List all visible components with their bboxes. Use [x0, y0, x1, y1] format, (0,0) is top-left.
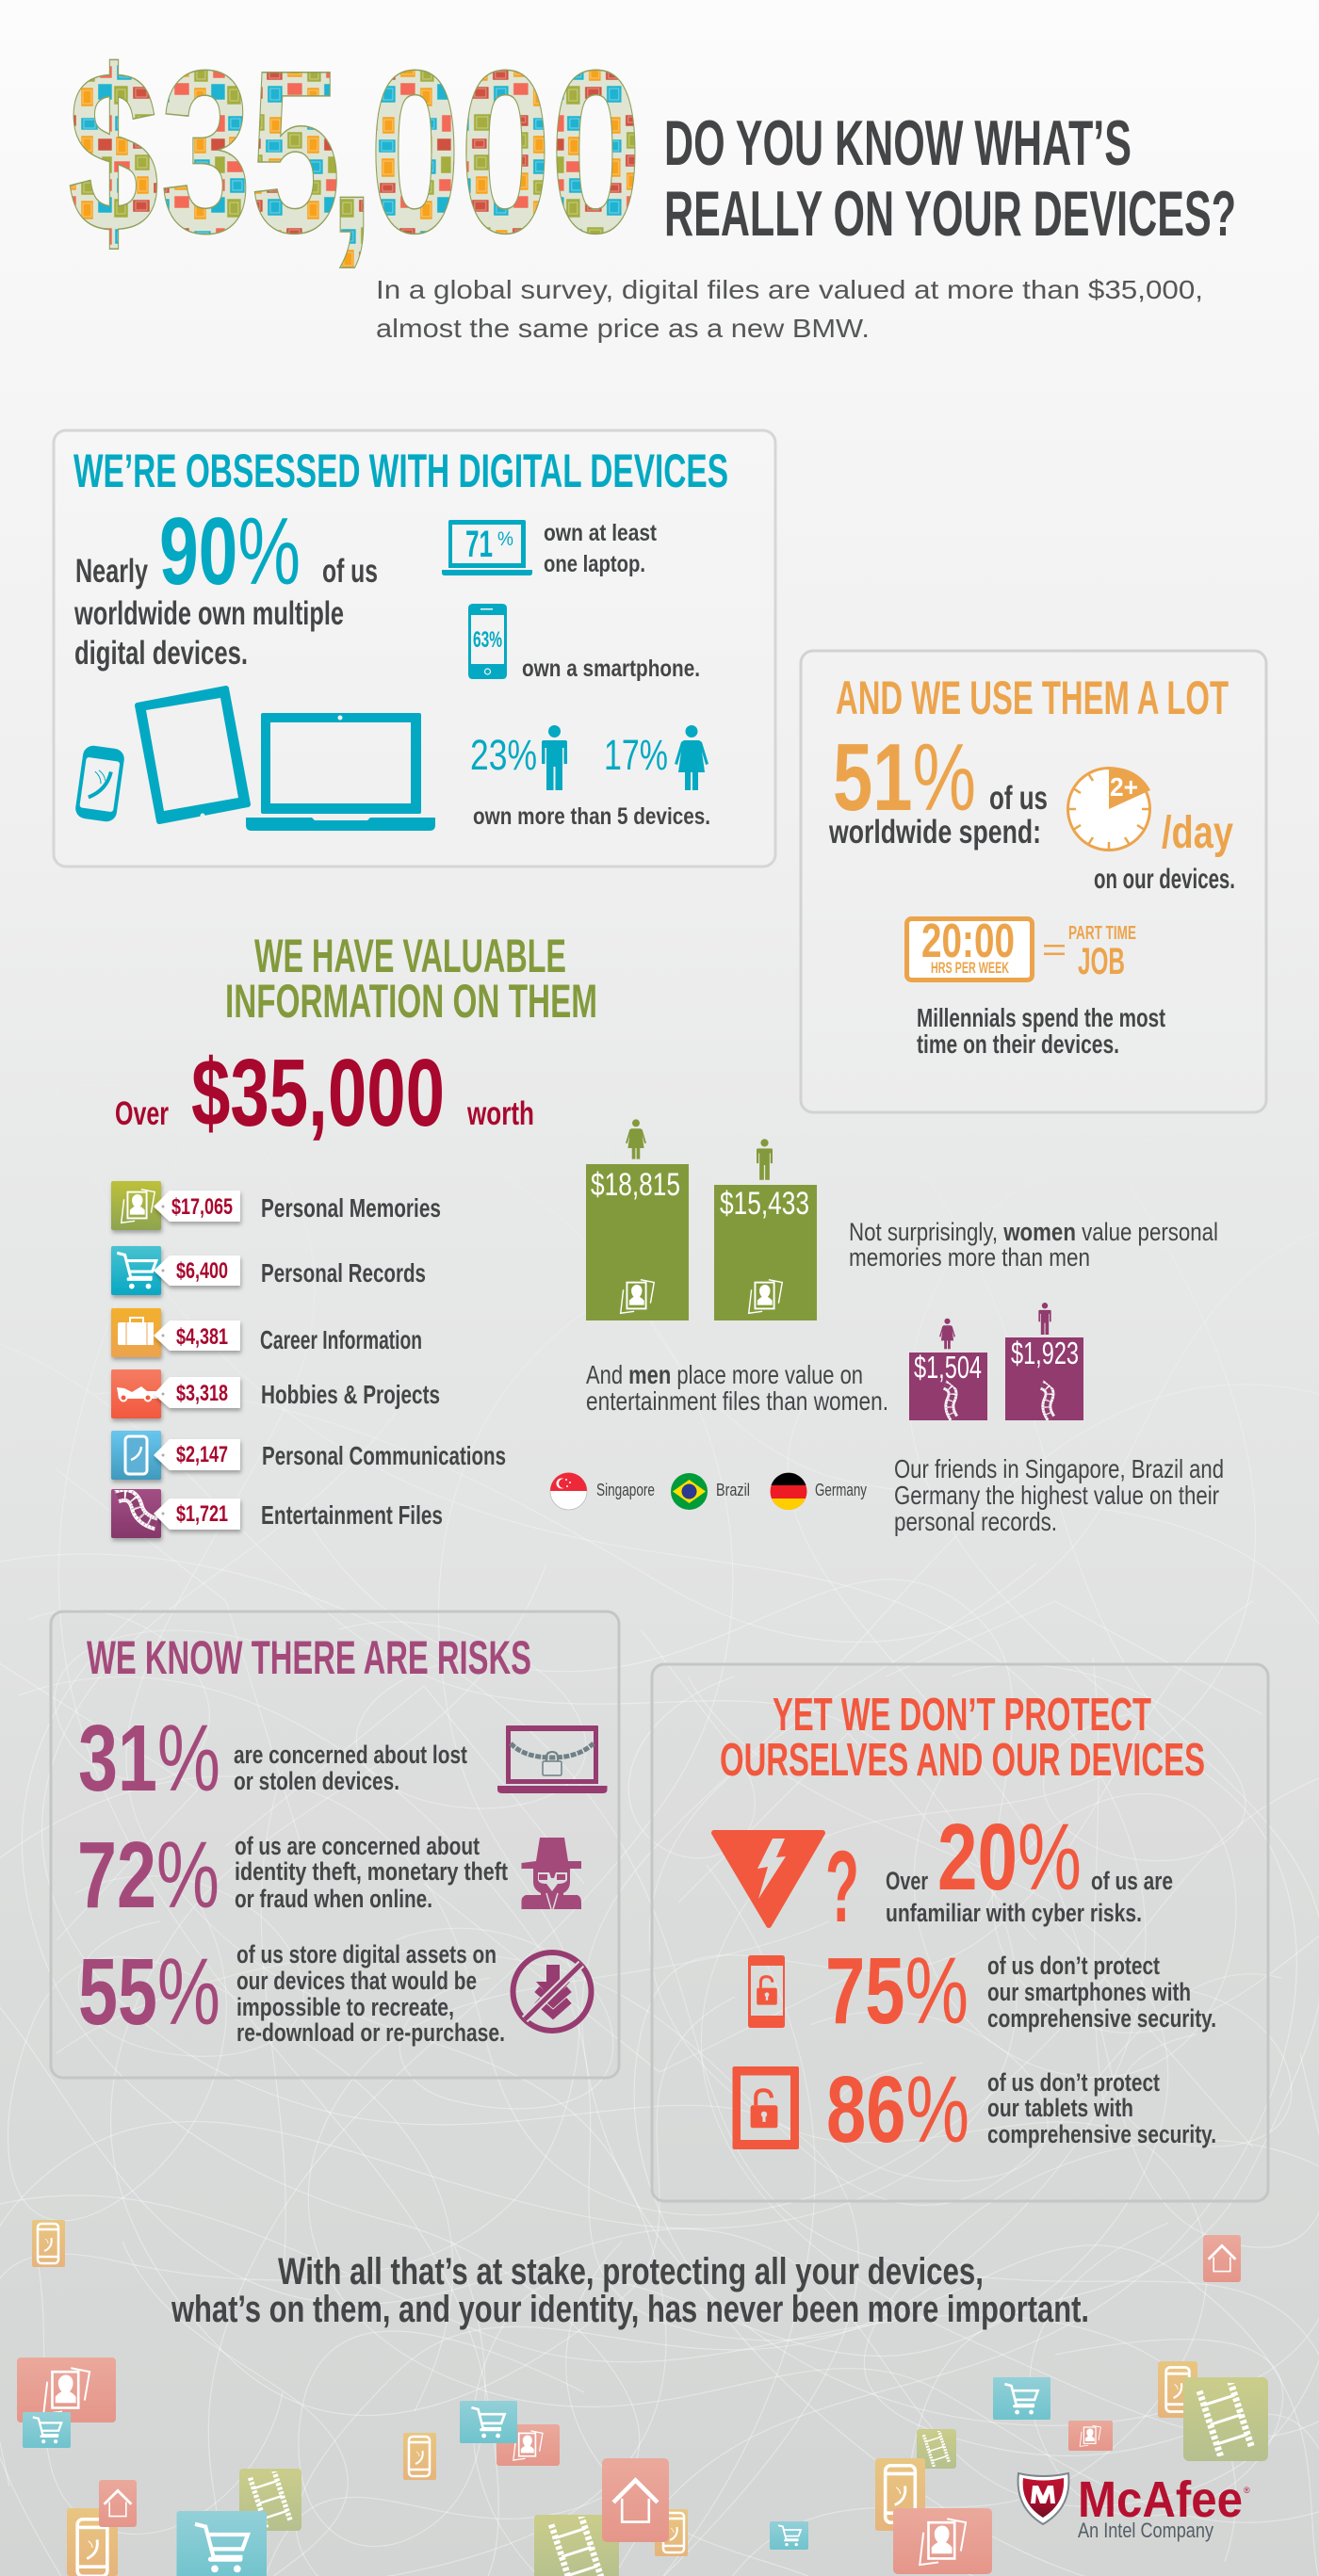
panel: we know there are risks	[51, 1612, 619, 2078]
51 percent statement	[828, 725, 1048, 851]
icon: tilted phone	[74, 744, 125, 823]
icon: smartphone 63 percent	[468, 604, 507, 679]
stat: 72 percent: identity theft, monetary theft	[235, 1857, 508, 1886]
digital clock 20:00 hours per week: 20:00	[921, 914, 1015, 967]
stat: over 20 percent	[886, 1805, 1173, 1927]
icon: smartphone 63 percent: 63%	[473, 627, 502, 653]
panel: yet we don't protect	[652, 1664, 1268, 2201]
logo wordmark: McAfee	[1078, 2471, 1243, 2528]
flag: Germany	[771, 1473, 806, 1510]
intro text	[376, 275, 1203, 343]
digital clock 20:00 hours per week: HRS PER WEEK	[931, 959, 1009, 977]
text: own a smartphone: own a smartphone.	[522, 656, 700, 682]
tile: film	[1183, 2377, 1268, 2461]
heading: $35,000 with device pattern: $35,000	[68, 24, 642, 282]
stat: 86 percent	[826, 2057, 1216, 2163]
stat: over 20 percent: Over	[886, 1867, 928, 1895]
row: personal communications: Personal Communications	[262, 1441, 506, 1470]
90 percent statement: Nearly	[75, 553, 148, 590]
equals part time job	[1044, 923, 1136, 982]
text: on our devices: on our devices.	[1094, 864, 1235, 895]
row: personal records: $6,400	[176, 1258, 228, 1284]
tile: cart	[177, 2511, 267, 2576]
tile: home	[99, 2480, 137, 2527]
90 percent statement: worldwide own multiple	[73, 595, 344, 632]
row: personal memories	[111, 1181, 441, 1230]
closing statement: With all that’s at stake, protecting all your devices,	[278, 2251, 984, 2292]
stat: 86 percent: 86%	[826, 2057, 969, 2163]
stat: 55 percent	[78, 1939, 505, 2047]
tile: photo	[497, 2424, 560, 2466]
equals part time job: PART TIME	[1068, 923, 1136, 944]
over $35,000 worth: Over	[115, 1095, 169, 1132]
stat: 72 percent: 72%	[77, 1823, 220, 1928]
row: career information: Career Information	[260, 1325, 422, 1354]
heading: we have valuable information	[225, 930, 597, 1028]
text: friends in Singapore, Brazil and Germany: personal records.	[894, 1507, 1057, 1536]
row: entertainment files	[111, 1489, 443, 1538]
tile: film	[239, 2469, 301, 2531]
stat: 31 percent: are concerned about lost	[234, 1741, 467, 1769]
stat: 75 percent	[825, 1938, 1216, 2044]
icon: woman	[939, 1319, 955, 1349]
stat: 75 percent: comprehensive security.	[987, 2004, 1216, 2033]
stat: 23 percent men: 23%	[470, 731, 537, 779]
tile: home	[1203, 2235, 1241, 2282]
tile: photo	[893, 2508, 992, 2574]
equals part time job: JOB	[1078, 941, 1125, 982]
stat: 75 percent: 75%	[825, 1938, 969, 2044]
tile: phone	[403, 2433, 436, 2480]
over $35,000 worth: $35,000	[191, 1041, 445, 1146]
text: own at least one laptop: one laptop.	[544, 551, 645, 577]
text: own more than 5 devices: own more than 5 devices.	[473, 803, 710, 830]
icon: laptop	[246, 713, 435, 831]
icon: chained laptop	[497, 1725, 607, 1793]
row: personal memories: Personal Memories	[261, 1193, 441, 1223]
tile: film	[534, 2515, 619, 2576]
intro text: almost the same price as a new BMW.	[376, 314, 870, 343]
row: hobbies and projects: $3,318	[176, 1381, 228, 1406]
icon: clock 2+ hours: 2+	[1110, 772, 1138, 802]
row: hobbies and projects: Hobbies & Projects	[261, 1380, 440, 1409]
stat: 86 percent: our tablets with	[987, 2094, 1133, 2122]
stat: 31 percent	[78, 1706, 467, 1811]
stat: 55 percent: 55%	[78, 1939, 220, 2045]
text: friends in Singapore, Brazil and Germany: Germany the highest value on their	[894, 1481, 1219, 1510]
stat: 55 percent: our devices that would be	[236, 1967, 477, 1995]
stat: 55 percent: impossible to recreate,	[236, 1993, 454, 2021]
bar: women: $18,815	[591, 1167, 680, 1203]
bar: men	[714, 1185, 817, 1320]
icon: spy	[522, 1838, 581, 1909]
row: hobbies and projects	[111, 1369, 440, 1418]
90 percent statement: digital devices.	[74, 635, 248, 672]
90 percent statement: of us	[322, 553, 378, 590]
tile: photo	[1068, 2421, 1113, 2451]
tile: film	[917, 2429, 956, 2469]
text: friends in Singapore, Brazil and Germany	[894, 1454, 1224, 1536]
value list	[111, 1181, 506, 1538]
row: career information: $4,381	[176, 1324, 228, 1350]
registered mark: ®	[1244, 2486, 1250, 2495]
stat: over 20 percent: of us are	[1091, 1867, 1173, 1895]
tile: phone	[32, 2220, 65, 2267]
text: /day: /day	[1162, 808, 1233, 858]
tile: cart	[460, 2401, 517, 2443]
stat: 72 percent	[77, 1823, 508, 1928]
row: personal communications	[111, 1431, 506, 1480]
text: friends in Singapore, Brazil and Germany: Our friends in Singapore, Brazil and	[894, 1454, 1224, 1483]
text: women value personal memories: Not surprisingly, women value personal	[849, 1218, 1218, 1246]
tile: phone	[655, 2509, 688, 2556]
stat: 55 percent: re-download or re-purchase.	[236, 2018, 505, 2047]
stat: 23 percent men	[470, 725, 567, 790]
over $35,000 worth: worth	[466, 1095, 534, 1132]
row: personal records	[111, 1246, 426, 1295]
stat: 86 percent: of us don’t protect	[987, 2068, 1160, 2097]
flags row	[550, 1473, 867, 1510]
panel heading: WE’RE OBSESSED WITH DIGITAL DEVICES	[73, 445, 728, 497]
90 percent statement: 90%	[159, 499, 301, 605]
icon: unlocked phone	[748, 1955, 785, 2028]
icon: question mark: ?	[825, 1829, 859, 1943]
logo shield	[1018, 2473, 1068, 2524]
icon: woman	[626, 1119, 646, 1159]
tile: photo	[17, 2357, 116, 2422]
heading: we have valuable information: WE HAVE VALUABLE	[254, 930, 566, 982]
bar: men	[1005, 1336, 1083, 1420]
row: entertainment files: Entertainment Files	[261, 1500, 443, 1530]
stat: 75 percent: our smartphones with	[987, 1978, 1191, 2006]
51 percent statement: 51%	[833, 725, 976, 831]
tile: phone	[1158, 2361, 1197, 2418]
icon: man	[757, 1139, 773, 1180]
stat: 75 percent: of us don’t protect	[987, 1952, 1160, 1980]
stat: over 20 percent: unfamiliar with cyber risks.	[886, 1899, 1142, 1927]
text: men value entertainment: entertainment files than women.	[586, 1386, 888, 1416]
bar: men: $1,923	[1011, 1336, 1079, 1370]
stat: 17 percent women: 17%	[604, 731, 668, 779]
stat: over 20 percent: 20%	[937, 1805, 1082, 1910]
stat: 72 percent: or fraud when online.	[235, 1885, 432, 1913]
icon: laptop 71 percent: 71	[465, 524, 493, 565]
51 percent statement: worldwide spend:	[828, 814, 1041, 851]
stat: 17 percent women	[604, 725, 708, 790]
panel: obsessed with digital devices	[54, 430, 775, 867]
heading: we have valuable information: INFORMATION ON THEM	[225, 975, 597, 1028]
label: Brazil: Brazil	[716, 1481, 750, 1499]
row: entertainment files: $1,721	[176, 1501, 228, 1527]
closing statement	[171, 2251, 1089, 2330]
icon: clock 2+ hours	[1067, 768, 1150, 851]
stat: 31 percent: or stolen devices.	[234, 1767, 399, 1795]
tagline: An Intel Company	[1078, 2519, 1213, 2542]
panel heading	[720, 1690, 1205, 1786]
bar: women	[909, 1350, 987, 1420]
text: own at least one laptop	[544, 520, 658, 577]
51 percent statement: of us	[989, 780, 1048, 817]
intro text: In a global survey, digital files are valued at more than $35,000,	[376, 275, 1203, 304]
text: women value personal memories: memories more than men	[849, 1243, 1090, 1272]
bar: women: $1,504	[914, 1350, 982, 1385]
stat: 86 percent: comprehensive security.	[987, 2120, 1216, 2148]
bar chart: entertainment files by gender	[909, 1303, 1083, 1420]
tile: cart	[23, 2412, 71, 2448]
label: Germany: Germany	[815, 1481, 867, 1499]
text: men value entertainment: And men place more value on	[586, 1360, 863, 1389]
panel: and we use them a lot	[801, 651, 1266, 1112]
text: women value personal memories	[849, 1218, 1218, 1272]
digital clock 20:00 hours per week	[906, 914, 1033, 980]
icon: warning triangle with lightning	[714, 1833, 822, 1925]
flag: Brazil	[671, 1473, 708, 1510]
text: millennials: Millennials spend the most	[917, 1003, 1165, 1032]
icon: tablet	[138, 689, 248, 821]
bar: women	[586, 1164, 689, 1320]
text: own at least one laptop: own at least	[544, 520, 658, 546]
icon: man	[1038, 1303, 1051, 1335]
flag: Singapore	[550, 1473, 587, 1510]
tile: phone	[67, 2508, 118, 2576]
icon: no download	[513, 1952, 592, 2031]
bar: men: $15,433	[720, 1186, 809, 1222]
floating device tiles	[17, 2220, 1268, 2576]
label: Singapore: Singapore	[596, 1481, 655, 1499]
icon: unlocked tablet	[733, 2066, 799, 2149]
icon: laptop 71 percent: %	[497, 528, 513, 550]
stat: 31 percent: 31%	[78, 1706, 220, 1811]
heading: do you know what's really on your devices	[664, 107, 1236, 250]
background scribble lines	[0, 1358, 1319, 2576]
stat: 72 percent: of us are concerned about	[235, 1832, 480, 1860]
logo: McAfee	[1018, 2471, 1250, 2542]
row: personal records: Personal Records	[261, 1258, 426, 1288]
90 percent statement	[73, 499, 378, 672]
tile: cart	[993, 2377, 1050, 2420]
panel heading: WE KNOW THERE ARE RISKS	[87, 1631, 531, 1684]
row: career information	[111, 1308, 422, 1357]
text: men value entertainment	[586, 1360, 888, 1416]
tile: cart	[770, 2521, 808, 2550]
tile: home	[602, 2458, 669, 2542]
text: millennials	[917, 1003, 1165, 1059]
stat: 55 percent: of us store digital assets on	[236, 1940, 497, 1968]
bar chart: personal memories by gender	[586, 1119, 817, 1320]
row: personal communications: $2,147	[176, 1442, 228, 1467]
row: personal memories: $17,065	[171, 1194, 233, 1220]
text: millennials: time on their devices.	[917, 1029, 1119, 1059]
tile: phone	[875, 2458, 925, 2531]
icon: laptop 71 percent	[442, 520, 532, 575]
